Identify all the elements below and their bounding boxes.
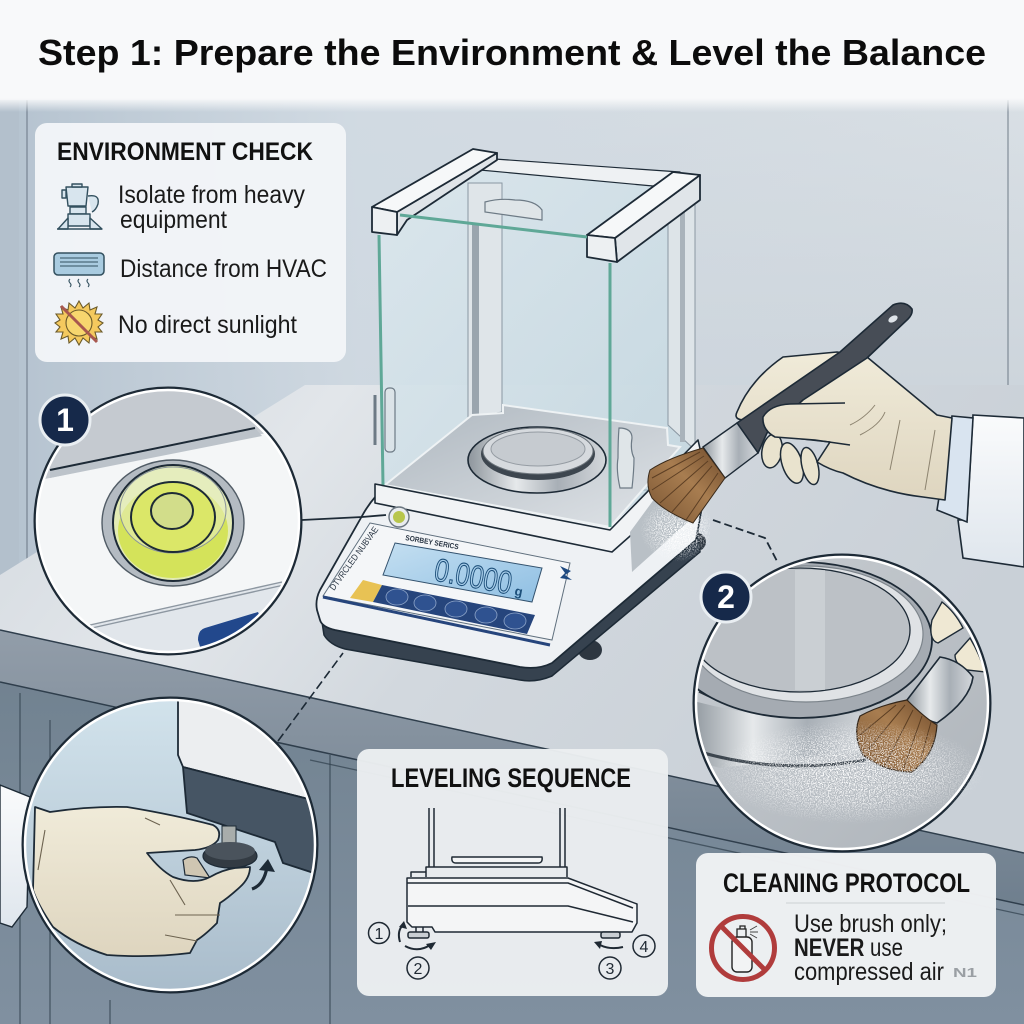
counter front lip and cabinets bbox=[0, 630, 1024, 1024]
cleaning brush bbox=[648, 303, 912, 523]
icon: HVAC unit bbox=[54, 253, 104, 287]
balance: front control panel bbox=[323, 523, 572, 645]
badge 1: 1 bbox=[56, 402, 74, 438]
levelling foot knob bbox=[203, 842, 257, 868]
brush ferrule in detail bbox=[907, 657, 973, 723]
brush handle bbox=[737, 303, 912, 453]
side brand label: DTVRCLED NUBVAE bbox=[328, 525, 380, 592]
balance: glass case back columns bbox=[468, 183, 695, 450]
title: Step 1: Prepare the Environment & Level the Balance bbox=[38, 32, 986, 73]
maker logo bbox=[560, 566, 572, 580]
step marker 1 bbox=[368, 922, 390, 944]
environment heading: ENVIRONMENT CHECK bbox=[57, 138, 313, 166]
LCD screen bbox=[383, 543, 542, 602]
analytical balance bbox=[316, 149, 706, 681]
text: isolate bbox=[118, 181, 305, 234]
text: isolate: Isolate from heavy bbox=[118, 181, 305, 209]
balance: green glass edges bbox=[379, 215, 610, 527]
panel: environment check bbox=[35, 123, 346, 362]
icon: heavy equipment bbox=[57, 184, 102, 229]
turn arrow bbox=[252, 867, 267, 889]
lab coat sleeve, right bbox=[937, 415, 1024, 567]
hand: lower fingers bbox=[759, 433, 822, 486]
pan outer ellipse bbox=[668, 562, 932, 718]
level bubble on balance bbox=[389, 507, 409, 527]
text: isolate: equipment bbox=[120, 206, 227, 234]
leader: brush to circle 2 bbox=[713, 520, 778, 563]
balance: base plate bbox=[375, 440, 705, 552]
leader: balance foot to knob callout bbox=[278, 653, 343, 741]
icon: no sunlight bbox=[55, 301, 103, 345]
panel: leveling sequence bbox=[357, 749, 668, 996]
text: cleaning rule bbox=[794, 910, 977, 986]
silver dusty edge of balance bbox=[630, 498, 690, 572]
hand: front finger over handle bbox=[763, 395, 935, 490]
step marker 4: 4 bbox=[640, 939, 649, 956]
brush bristles bbox=[648, 448, 725, 523]
step marker 3: 3 bbox=[606, 961, 615, 978]
detail circle 2: brushing the pan bbox=[692, 554, 992, 852]
step marker 2 bbox=[407, 957, 429, 979]
dust in detail bbox=[724, 722, 979, 820]
title band bbox=[0, 0, 1024, 112]
step marker 3 bbox=[599, 957, 621, 979]
text: cleaning rule: N1 bbox=[953, 965, 977, 980]
icon: no compressed air bbox=[712, 916, 774, 980]
step marker 1: 1 bbox=[375, 926, 384, 943]
panel: cleaning protocol bbox=[696, 853, 996, 997]
dust on balance edge bbox=[643, 506, 710, 561]
text: cleaning rule: Use brush only; bbox=[794, 910, 947, 938]
hand: gloved palm and upper finger bbox=[736, 352, 952, 500]
step marker 4 bbox=[633, 935, 655, 957]
knob thumb behind bbox=[183, 857, 210, 878]
balance corner in detail bbox=[177, 701, 306, 798]
balance: white body bbox=[316, 490, 705, 668]
balance: glass panes bbox=[378, 165, 695, 527]
brush ferrule bbox=[703, 423, 758, 478]
badge 1 bbox=[40, 395, 90, 445]
knob stem bbox=[222, 826, 236, 846]
counter top surface bbox=[0, 385, 1024, 853]
text: HVAC: Distance from HVAC bbox=[120, 255, 327, 283]
panel corner in detail bbox=[198, 612, 259, 647]
pan top surface bbox=[690, 568, 910, 692]
arrows: turn direction bbox=[399, 921, 623, 950]
badge 2: 2 bbox=[717, 579, 735, 615]
text: sunlight: No direct sunlight bbox=[118, 311, 297, 339]
spirit level vial bbox=[102, 460, 244, 586]
text: cleaning rule: NEVER use bbox=[794, 934, 903, 962]
balance: door handles bbox=[375, 199, 634, 488]
fingers in detail bbox=[931, 602, 963, 643]
brush bristles in detail bbox=[857, 700, 937, 772]
balance: weighing pan bbox=[468, 427, 606, 493]
reading unit: g bbox=[513, 583, 524, 599]
diagram: balance side view bbox=[407, 808, 637, 938]
balance: top frame bbox=[372, 149, 700, 262]
text: cleaning rule: compressed air bbox=[794, 958, 944, 986]
balance: dark underside and feet bbox=[322, 520, 706, 681]
badge 2 bbox=[701, 572, 751, 622]
balance: chamber floor bbox=[385, 405, 680, 527]
step marker 2: 2 bbox=[414, 961, 423, 978]
pan base ring bbox=[697, 702, 860, 768]
leveling heading: LEVELING SEQUENCE bbox=[391, 763, 631, 793]
gloved hand in detail bbox=[33, 807, 250, 956]
detail circle 3: foot adjustment bbox=[23, 690, 320, 992]
detail circle 1: bubble level bbox=[30, 385, 310, 660]
leader: circle 1 to bubble bbox=[302, 515, 386, 520]
blue button strip bbox=[373, 585, 535, 634]
lab coat sleeve, left bbox=[0, 785, 30, 927]
series label: SORBEY SERICS bbox=[405, 533, 459, 551]
weight reading: 0.0000 bbox=[432, 551, 515, 601]
yellow power button bbox=[350, 580, 382, 602]
cleaning heading: CLEANING PROTOCOL bbox=[723, 868, 970, 898]
